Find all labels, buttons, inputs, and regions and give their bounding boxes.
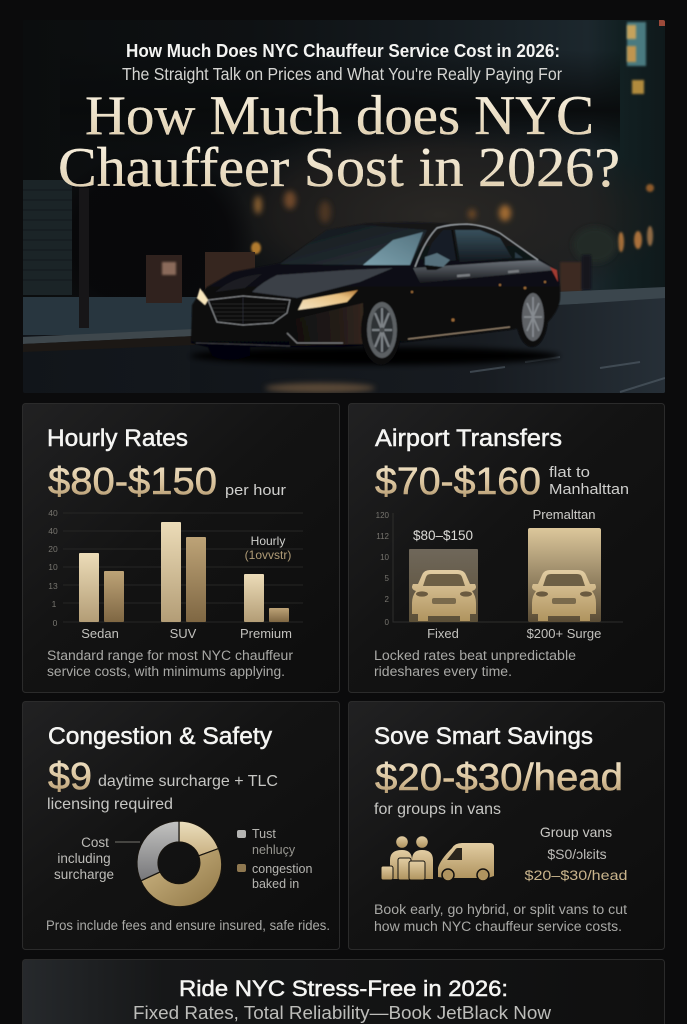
donut legend: Tust <box>252 827 276 841</box>
cta subline: Fixed Rates, Total Reliability—Book JetBlack Now <box>133 1003 552 1023</box>
axis labels <box>376 511 390 627</box>
axis labels: 112 <box>376 532 390 541</box>
hero subtitle line 1: How Much Does NYC Chauffeur Service Cost in 2026: <box>126 41 560 61</box>
axis labels: 13 <box>48 581 58 591</box>
unit: flat to Manhattan: Manhalttan <box>549 481 629 498</box>
main title <box>58 85 620 199</box>
sill <box>408 327 510 339</box>
donut callout <box>54 835 140 882</box>
label: surge: $200+ Surge <box>527 626 601 641</box>
hood highlight <box>252 268 393 298</box>
icon: van <box>438 843 494 881</box>
caption: congestion: Pros include fees and ensure insured, safe rides. <box>46 918 330 933</box>
price: hourly: $80-$150 <box>48 461 217 503</box>
car <box>190 222 560 365</box>
caption: savings <box>374 902 627 934</box>
side windows <box>423 230 457 265</box>
mirror <box>425 253 450 267</box>
label: fixed value: $80–$150 <box>413 528 473 543</box>
axis labels: 0 <box>53 618 58 628</box>
icon: car fixed <box>412 570 476 621</box>
donut legend: congestion <box>252 862 313 876</box>
axis labels: 10 <box>380 553 390 562</box>
donut legend: nehluçy <box>252 843 296 857</box>
label: fixed: Fixed <box>427 626 459 641</box>
windshield <box>280 225 427 265</box>
unit: flat to Manhattan: flat to <box>549 464 590 481</box>
donut legend <box>237 827 313 891</box>
panel: congestion and safety <box>22 702 340 950</box>
headlights <box>298 290 358 310</box>
caption: hourly <box>47 648 294 679</box>
main title: Chauffeer Sost in 2026? <box>58 137 620 199</box>
group van pricing <box>524 824 628 883</box>
unit: flat to Manhattan <box>549 464 629 498</box>
heading: congestion and safety: Congestion & Safety <box>48 723 272 750</box>
axis labels: 1 <box>52 599 57 609</box>
caption: airport <box>374 648 576 679</box>
surcharge description: licensing required <box>47 796 173 813</box>
donut chart <box>137 821 222 907</box>
donut legend: baked in <box>252 877 299 891</box>
caption: savings: Book early, go hybrid, or split vans to cut <box>374 902 627 917</box>
group van pricing: $S0/ɔlɛits <box>547 846 607 862</box>
panel: airport transfers <box>348 404 664 692</box>
panel: smart savings <box>348 702 664 950</box>
hero subtitle line 2: The Straight Talk on Prices and What You're Really Paying For <box>122 64 562 84</box>
street scene background <box>249 20 665 292</box>
panel: hero <box>23 20 675 393</box>
window chrome <box>415 224 538 267</box>
caption: airport: Locked rates beat unpredictable <box>374 648 576 663</box>
surcharge description: daytime surcharge + TLC <box>98 773 278 790</box>
rear wheel <box>516 287 548 347</box>
axis labels: 10 <box>48 562 58 572</box>
icon: car surge <box>532 570 596 621</box>
brick box <box>146 252 255 303</box>
panel: call to action <box>22 960 664 1024</box>
heading: smart savings: Sove Smart Savings <box>374 723 593 750</box>
price: airport: $70-$160 <box>375 461 541 503</box>
axis labels: 2 <box>385 595 390 604</box>
main title: How Much does NYC <box>85 85 594 147</box>
axis labels: 0 <box>385 618 390 627</box>
price: per head: $20-$30/head <box>375 757 623 799</box>
body shoulder <box>413 260 556 283</box>
donut callout: Cost <box>81 835 109 850</box>
bumper chrome <box>287 333 343 343</box>
street pole <box>79 188 89 328</box>
bar: fixed <box>409 549 478 622</box>
caption: airport: rideshares every time. <box>374 664 512 679</box>
caption: hourly: Standard range for most NYC chauffeur <box>47 648 294 663</box>
door handles <box>457 275 470 276</box>
cta headline: Ride NYC Stress-Free in 2026: <box>179 976 508 1001</box>
sidewalk and road <box>23 287 665 393</box>
bar labels: Premium <box>240 626 292 641</box>
axis labels: 5 <box>385 574 390 583</box>
axis labels: 40 <box>48 508 58 518</box>
group van pricing: Group vans <box>540 824 612 840</box>
bar labels: Sedan <box>81 626 119 641</box>
caption: hourly: service costs, with minimums applying. <box>47 664 285 679</box>
chart note: (1ovvstr) <box>245 548 291 562</box>
axis labels <box>48 508 58 628</box>
unit: groups: for groups in vans <box>374 801 501 818</box>
axis labels: 20 <box>48 544 58 554</box>
price: surcharge: $9 <box>48 756 92 798</box>
surcharge description <box>47 773 278 813</box>
unit: per hour: per hour <box>225 482 286 499</box>
axis labels: 40 <box>48 526 58 536</box>
label: premium: Premalttan <box>533 507 595 522</box>
group van pricing: $20–$30/head <box>524 867 628 883</box>
bars <box>79 522 289 622</box>
heading: airport transfers: Airport Transfers <box>375 425 562 452</box>
front wheel <box>360 301 401 363</box>
donut callout: surcharge <box>54 867 114 882</box>
bar: surge <box>528 528 601 622</box>
chart note <box>245 534 291 562</box>
grille <box>208 296 290 325</box>
bar chart: fixed vs surge <box>376 507 623 641</box>
bar labels <box>81 626 292 641</box>
icon: group with luggage <box>381 836 433 880</box>
lower bumper <box>290 303 364 346</box>
donut callout: including <box>57 851 111 866</box>
heading: hourly rates: Hourly Rates <box>47 425 188 452</box>
chart note: Hourly <box>251 534 285 548</box>
axis labels: 120 <box>376 511 390 520</box>
tail light <box>550 267 558 282</box>
door reflections <box>411 281 546 322</box>
bar chart: hourly rates by vehicle <box>48 508 303 641</box>
rolling shutter <box>23 180 72 295</box>
panel: hourly rates <box>22 404 340 692</box>
bar labels: SUV <box>170 626 197 641</box>
caption: savings: how much NYC chauffeur service costs. <box>374 919 622 934</box>
